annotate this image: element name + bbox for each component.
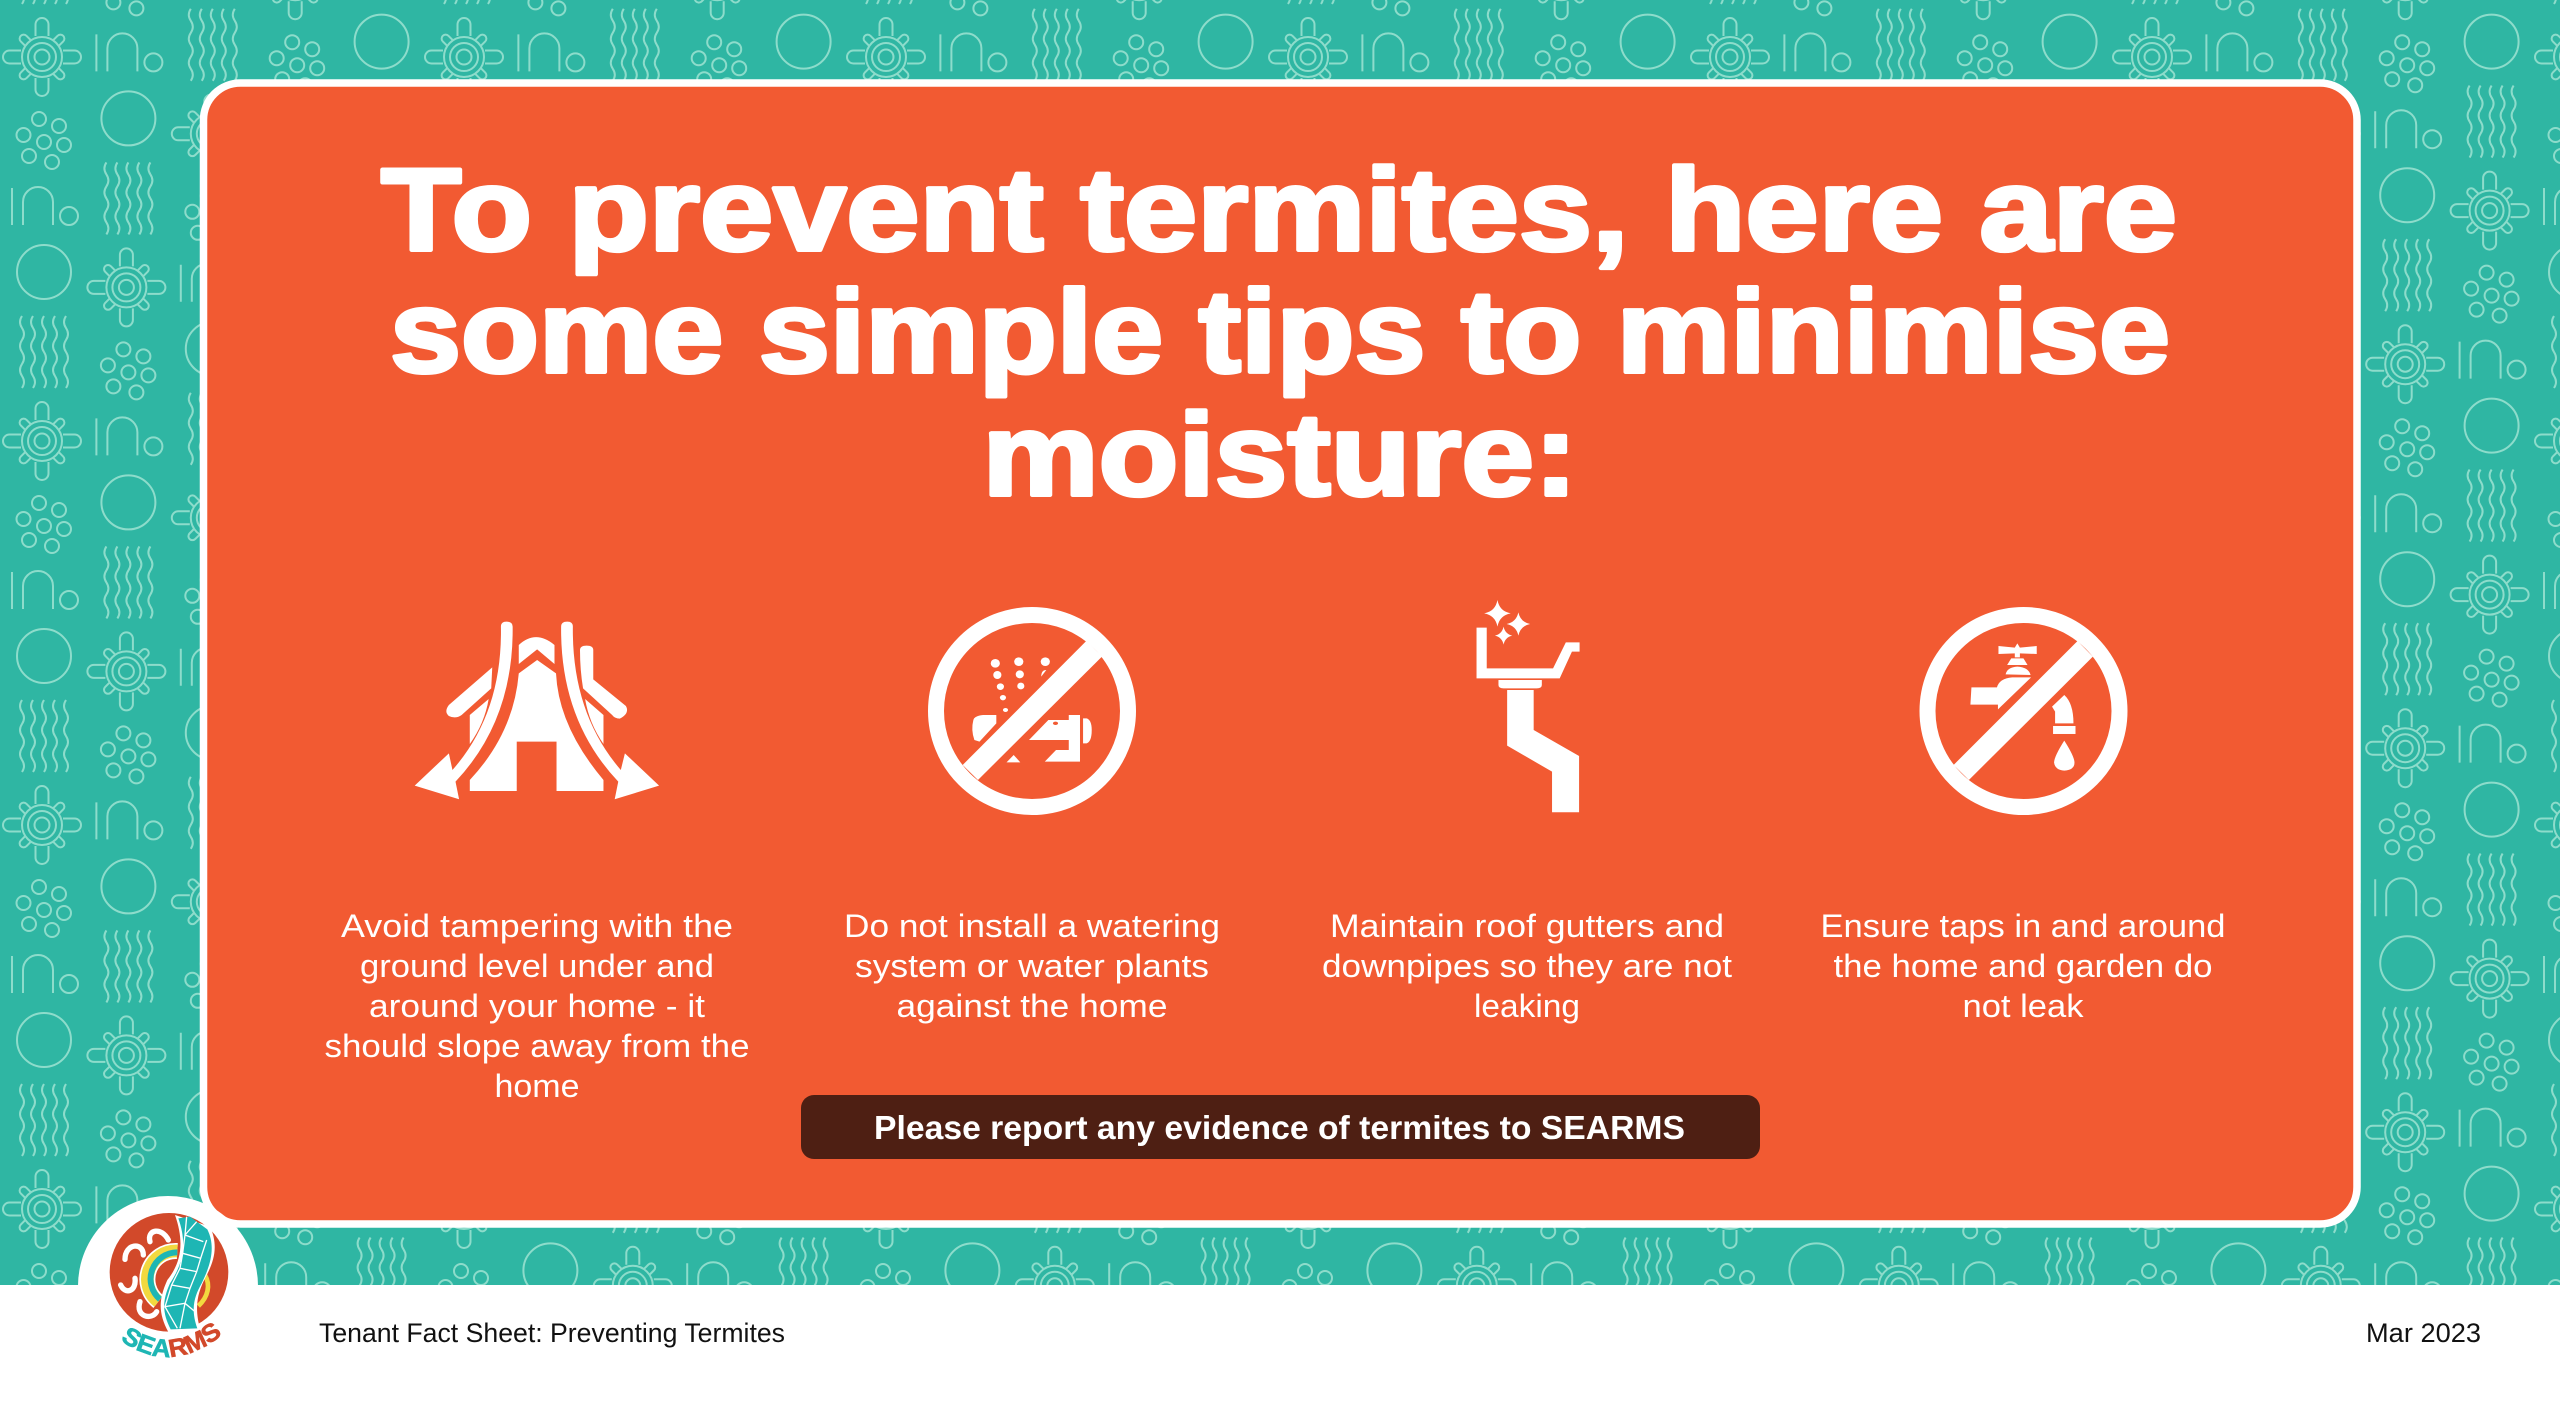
text: watering system: against the home	[896, 988, 1168, 1024]
text: taps	[1820, 908, 2226, 1024]
text: gutters: Maintain roof gutters and	[1330, 908, 1724, 944]
footer: fact sheet title: Tenant Fact Sheet: Preventing Termites	[319, 1318, 785, 1348]
text: avoid tampering: home	[494, 1068, 580, 1104]
title: some simple tips to minimise	[390, 266, 2170, 397]
text: taps: Ensure taps in and around	[1820, 908, 2226, 944]
text: watering system: Do not install a watering	[844, 908, 1220, 944]
text: gutters	[1322, 908, 1732, 1024]
text: gutters: downpipes so they are not	[1322, 948, 1732, 984]
callout: report termites	[801, 1095, 1760, 1159]
text: avoid tampering: should slope away from the	[324, 1028, 750, 1064]
icon: no watering system	[936, 615, 1128, 807]
icon: house with ground sloping away	[415, 622, 659, 799]
text: avoid tampering: Avoid tampering with the	[341, 908, 733, 944]
logo: SEARMS: SEARMS	[122, 1323, 220, 1358]
icon: roof gutter and downpipe	[1477, 600, 1580, 812]
logo: SEARMS	[78, 1196, 258, 1358]
panel: tips card	[204, 83, 2357, 1224]
callout: report termites: Please report any evidence of termites to SEARMS	[874, 1109, 1685, 1146]
text: taps: not leak	[1962, 988, 2085, 1024]
text: avoid tampering: ground level under and	[360, 948, 714, 984]
title	[381, 144, 2177, 520]
text: avoid tampering: around your home - it	[369, 988, 705, 1024]
icon: no leaking tap	[1928, 615, 2120, 807]
title: To prevent termites, here are	[381, 144, 2177, 275]
text: watering system	[844, 908, 1220, 1024]
text: watering system: system or water plants	[855, 948, 1209, 984]
text: taps: the home and garden do	[1834, 948, 2212, 984]
text: avoid tampering	[324, 908, 750, 1104]
text: gutters: leaking	[1474, 988, 1580, 1024]
footer: date: Mar 2023	[2366, 1318, 2481, 1348]
title: moisture:	[982, 389, 1578, 520]
